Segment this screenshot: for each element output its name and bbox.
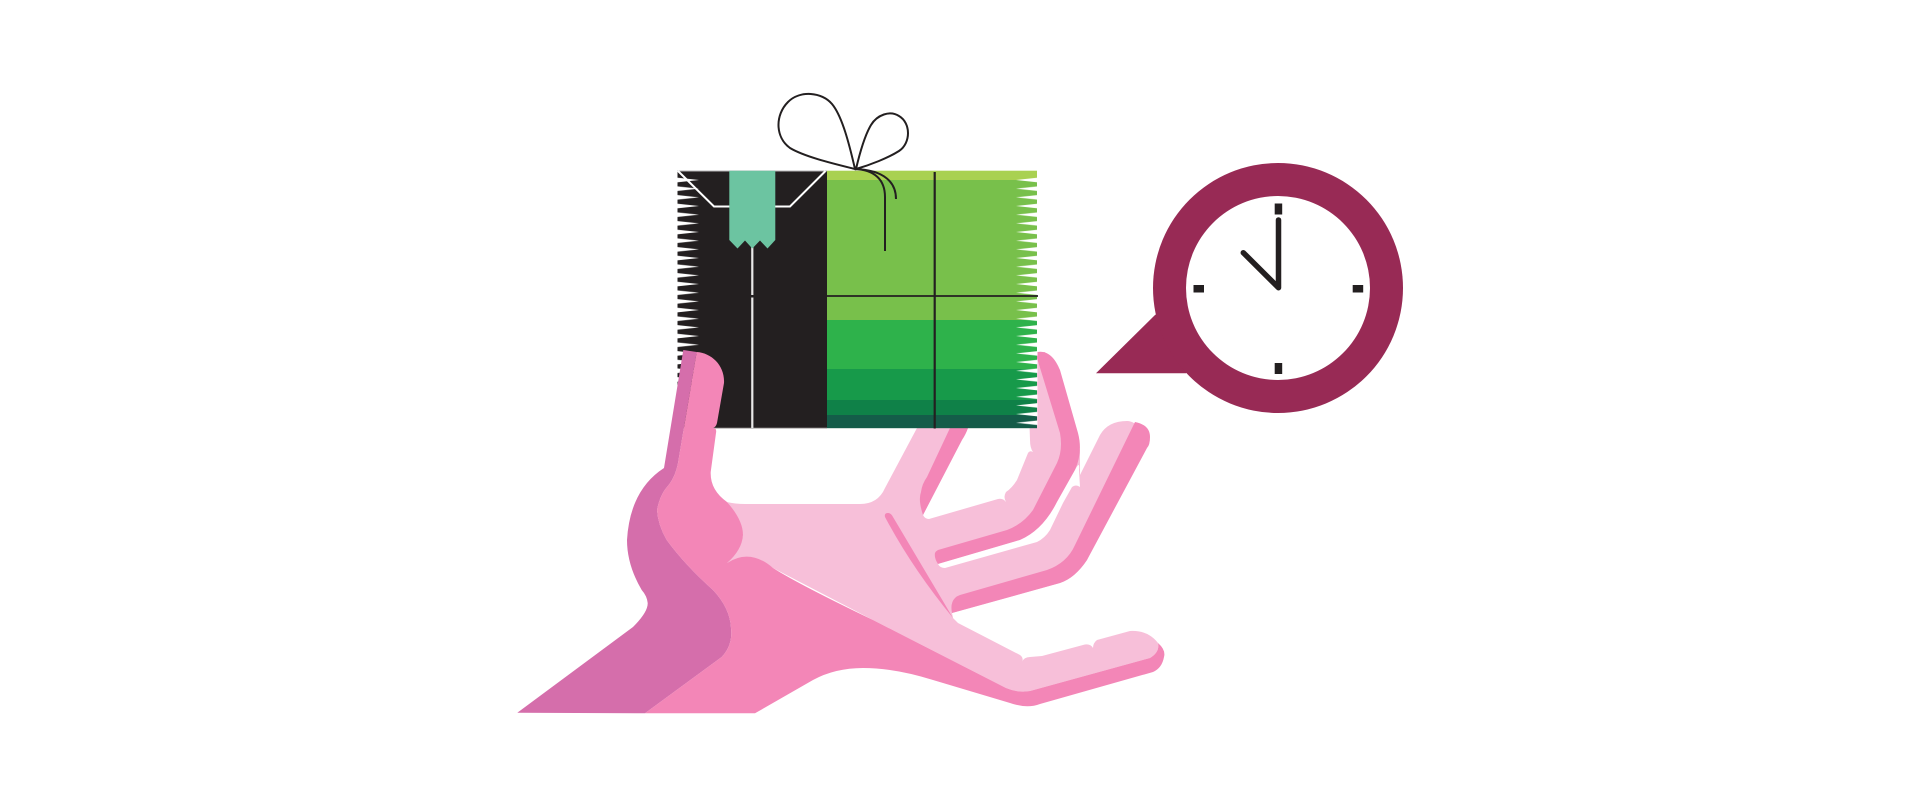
bow: [778, 94, 908, 251]
horizontal dark ribbon line: [827, 295, 1038, 297]
box green bands: [827, 171, 1037, 428]
bubble tail: [1096, 300, 1215, 373]
forearm and wrist in front of the gift: [517, 350, 1164, 713]
hour ticks: [1194, 204, 1363, 374]
box outline on dark side: [678, 171, 827, 428]
palm crease: [885, 513, 953, 618]
box dark side: [678, 171, 827, 428]
clock hands: [1243, 220, 1278, 288]
white zigzag on the right edge: [1016, 176, 1038, 427]
gap between first and second fingers: [938, 465, 1080, 568]
teal ribbon: [729, 171, 775, 248]
second finger pink edge: [951, 422, 1150, 613]
white zigzag on the left edge: [678, 176, 699, 388]
palm and fingers light fill: [727, 352, 1158, 692]
first finger pink edge: [935, 352, 1080, 564]
hand: palm and fingers behind the gift: [727, 352, 1158, 692]
magenta arm shadow: [517, 350, 731, 713]
clock speech bubble: [1096, 163, 1403, 413]
clock face: [1186, 196, 1370, 380]
dark ribbon lines on green side: [934, 172, 936, 428]
lid fold lines: [678, 171, 826, 206]
inner finger pink strip: [920, 428, 968, 515]
white ribbon line: [751, 246, 753, 428]
gift box: [678, 94, 1038, 428]
pink arm and underside of hand: [645, 352, 1164, 713]
clock ring: [1153, 163, 1403, 413]
